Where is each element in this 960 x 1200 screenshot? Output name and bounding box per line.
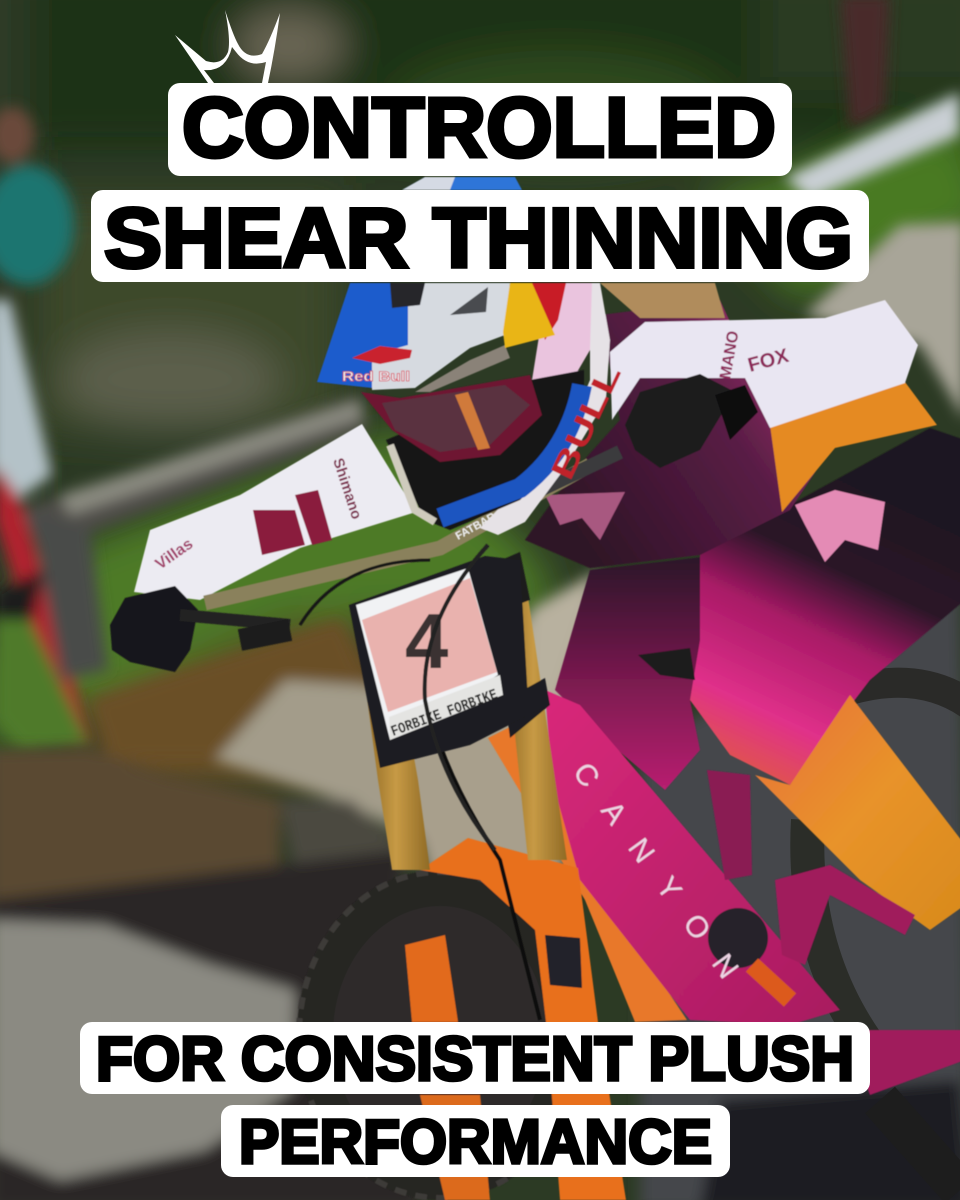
helmet — [317, 177, 628, 535]
plate name: FORBIKE FORBIKE — [389, 686, 500, 741]
rider legs — [555, 428, 960, 930]
subtitle line 2: PERFORMANCE — [239, 1108, 712, 1177]
gloves — [110, 374, 758, 672]
saddle — [638, 648, 695, 680]
jersey torso — [525, 283, 937, 568]
frame, orange fork guard and front wheel: CANYON — [566, 757, 745, 985]
left sleeve: Villas — [153, 535, 196, 573]
subtitle line 1: FOR CONSISTENT PLUSH — [96, 1025, 854, 1094]
logo: Red Bull: Red Bull — [342, 368, 410, 384]
left sleeve: Shimano — [329, 456, 365, 521]
rider and bike — [110, 177, 960, 1200]
title line 2: SHEAR THINNING — [104, 191, 853, 285]
rear wheel — [807, 683, 960, 1190]
handlebar — [180, 452, 620, 640]
number plate — [349, 545, 548, 850]
goggles — [361, 375, 542, 462]
helmet: BULL — [544, 359, 628, 485]
right sleeve: FOX — [746, 345, 792, 377]
fork stanchions — [362, 552, 567, 870]
title line 1: CONTROLLED — [182, 80, 776, 174]
icon: crown outline — [175, 10, 280, 83]
rocks — [0, 570, 960, 1200]
handlebar: FATBAR — [454, 511, 498, 543]
left sleeve — [134, 424, 416, 600]
far banner, rock and background rider — [0, 0, 960, 750]
frame, orange fork guard and front wheel — [299, 640, 960, 1200]
right sleeve — [610, 300, 918, 428]
race number: 4 — [405, 597, 448, 685]
right sleeve: MANO — [717, 330, 742, 381]
